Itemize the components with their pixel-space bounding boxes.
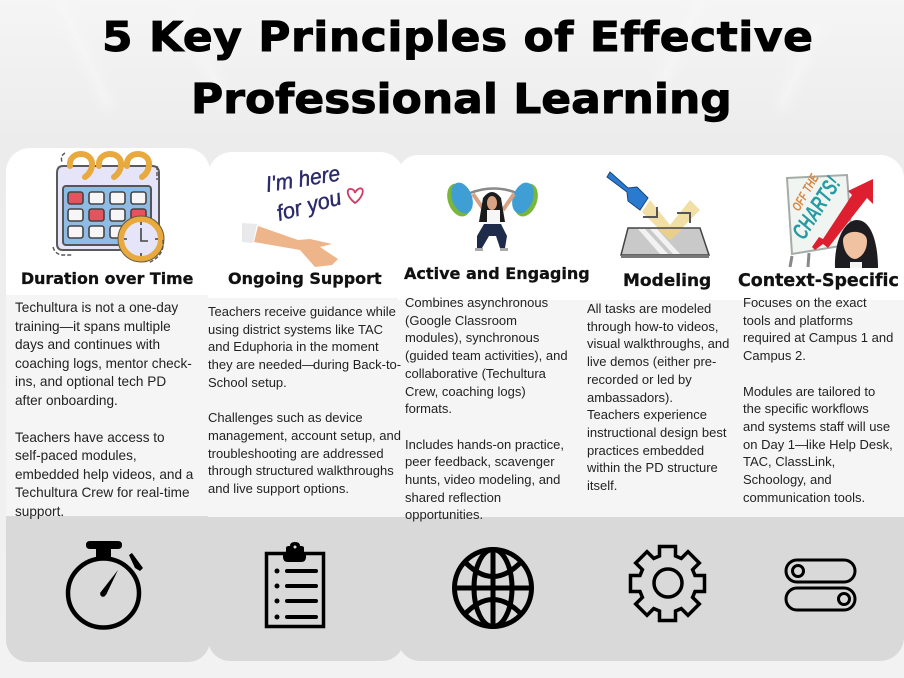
icon: globe [452, 547, 534, 629]
text: Duration over Time: Techultura is not a one-day [15, 300, 178, 315]
text: Context-Specific [743, 295, 893, 505]
text: Ongoing Support: and Eduphoria in the moment [208, 339, 379, 354]
text: Modeling: All tasks are modeled [587, 301, 711, 316]
heading: Ongoing Support: Ongoing Support [228, 268, 382, 288]
text: Duration over Time: self-paced modules, [15, 448, 137, 463]
icon: calendar with clock [52, 151, 164, 263]
text: Context-Specific: the specific workflows [743, 401, 869, 416]
text: Duration over Time: embedded help videos, and a [15, 466, 193, 482]
panel white header [398, 155, 904, 300]
heading: Active and Engaging: Active and Engaging [404, 264, 590, 283]
text: Modeling: recorded or led by [587, 372, 692, 387]
text: Active and Engaging: shared reflection [405, 490, 501, 505]
text: Context-Specific: on Day 1—like Help Desk, [743, 437, 893, 452]
text: Active and Engaging: Combines asynchronous [405, 295, 548, 310]
text: Ongoing Support [208, 304, 401, 496]
text: Context-Specific: required at Campus 1 and [743, 330, 893, 345]
panel: Active, Modeling and Context-Specific [398, 155, 904, 661]
text: Ongoing Support: management, account setup, and [208, 428, 401, 443]
icon: off the charts avatar: CHARTS! [786, 172, 846, 244]
text: Duration over Time: Techultura Crew for real-time [15, 485, 190, 500]
icon: flashlight reflecting on mirror [606, 171, 710, 258]
text: Context-Specific: Schoology, and [743, 472, 832, 487]
text: Modeling: visual walkthroughs, and [587, 336, 729, 351]
icon: off the charts avatar [786, 171, 878, 268]
text: Modeling: instructional design best [587, 425, 726, 440]
heading: Modeling: Modeling [623, 271, 711, 291]
text: Ongoing Support: Teachers receive guidance while [208, 304, 396, 319]
text: Ongoing Support: using district systems like TAC [208, 322, 383, 337]
text: Ongoing Support: they are needed—during Back-to- [208, 357, 401, 372]
panel white header [6, 148, 210, 295]
text: Duration over Time: Teachers have access to [15, 430, 165, 444]
text: Context-Specific: Modules are tailored to [743, 384, 875, 399]
icon: off the charts avatar: OFF THE [789, 171, 822, 214]
text: Context-Specific: and systems staff will use [743, 419, 890, 434]
text: Active and Engaging: hunts, video modeling, and [405, 472, 560, 487]
panel icon strip [6, 516, 210, 662]
text: Active and Engaging: Crew, coaching logs) [405, 384, 526, 399]
panel: Ongoing Support [208, 152, 401, 661]
text: Active and Engaging: peer feedback, scavenger [405, 454, 555, 469]
panel body background [6, 295, 210, 516]
text: Context-Specific: communication tools. [743, 490, 865, 505]
text: Active and Engaging: formats. [405, 401, 452, 416]
text: Active and Engaging: (Google Classroom [405, 313, 517, 328]
text: Modeling: within the PD structure [587, 460, 718, 475]
text: Active and Engaging: opportunities. [405, 507, 483, 522]
text: Context-Specific: tools and platforms [743, 313, 853, 328]
heading: Duration over Time: Duration over Time [21, 268, 193, 288]
text: Modeling: itself. [587, 478, 617, 493]
icon: I'm here for you with hand: for you [274, 185, 344, 226]
icon: stopwatch [66, 541, 143, 630]
icon: toggle switches [784, 558, 856, 612]
text: Active and Engaging: modules), synchronous [405, 330, 539, 345]
panel icon strip [208, 517, 404, 661]
icon: weightlifter avatar [447, 182, 538, 251]
text: Modeling: Teachers experience [587, 407, 707, 422]
panel body background [208, 298, 404, 517]
icon: gear [628, 544, 706, 622]
text: Duration over Time: ins, and optional tech PD [15, 374, 166, 389]
panel icon strip [398, 517, 904, 661]
text: Duration over Time: after onboarding. [15, 392, 118, 408]
icon: I'm here for you with hand: I'm here [264, 161, 342, 197]
text: Modeling [587, 301, 729, 493]
text: Duration over Time [15, 300, 194, 519]
text: Duration over Time: days and continues with [15, 337, 160, 352]
panel white header [208, 152, 404, 298]
text: Modeling: through how-to videos, [587, 319, 719, 334]
icon: clipboard checklist [264, 542, 326, 628]
text: Active and Engaging [405, 295, 568, 522]
text: Context-Specific: Campus 2. [743, 348, 806, 363]
text: Modeling: practices embedded [587, 443, 704, 458]
text: Ongoing Support: troubleshooting are addressed [208, 446, 384, 461]
text: Ongoing Support: through structured walkthroughs [208, 463, 394, 478]
text: Context-Specific: TAC, ClassLink, [743, 454, 835, 469]
text: Modeling: ambassadors). [587, 390, 673, 405]
text: Active and Engaging: Includes hands-on practice, [405, 437, 564, 452]
panel body background [398, 300, 904, 517]
text: Context-Specific: Focuses on the exact [743, 295, 867, 310]
text: Active and Engaging: (guided team activities), and [405, 348, 568, 363]
text: Ongoing Support: School setup. [208, 375, 287, 390]
text: Duration over Time: training—it spans multiple [15, 318, 171, 334]
title [102, 13, 814, 123]
text: Duration over Time: coaching logs, mentor check- [15, 356, 192, 370]
text: Duration over Time: support. [15, 504, 64, 518]
text: Ongoing Support: and live support options. [208, 481, 349, 496]
text: Active and Engaging: collaborative (Techultura [405, 366, 546, 381]
heading: Context-Specific: Context-Specific [738, 271, 899, 291]
title line 1: 5 Key Principles of Effective [102, 13, 814, 61]
icon: I'm here for you with hand [242, 161, 364, 267]
title line 2: Professional Learning [191, 75, 732, 123]
text: Ongoing Support: Challenges such as device [208, 410, 363, 425]
text: Modeling: live demos (either pre- [587, 354, 716, 369]
panel: Duration over Time [6, 148, 210, 662]
